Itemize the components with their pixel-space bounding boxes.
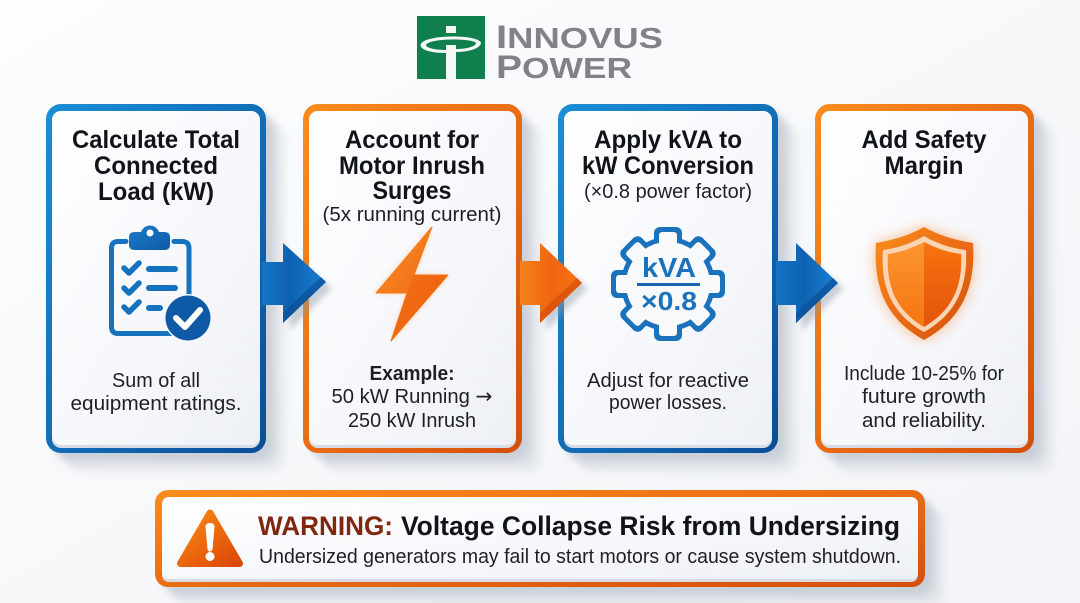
panel: add safety margin [815,104,1054,473]
panel: account for motor inrush surges [303,104,542,473]
heading: Surges [372,177,452,205]
icon: shield [876,227,973,340]
example text: 250 kW Inrush [348,409,476,432]
description [587,369,749,414]
heading: (5x running current) [322,203,502,226]
example text: 50 kW Running → [332,384,492,408]
icon: warning triangle [180,513,240,564]
heading: (×0.8 power factor) [584,180,752,203]
heading: Account for [345,126,479,154]
warning heading: Voltage Collapse Risk from Undersizing [401,511,900,541]
logo wordmark: POWER [496,49,632,85]
description [844,362,1004,432]
arrow: step 1 to 2 [262,243,332,330]
heading: Apply kVA to [594,126,742,154]
example text: Example: [370,362,454,385]
description: power losses. [609,391,727,414]
heading: Calculate Total [72,126,240,154]
description: equipment ratings. [70,392,242,415]
icon: lightning bolt [376,227,448,341]
heading: Margin [884,152,964,180]
description: future growth [862,385,986,408]
heading [322,126,502,226]
logo mark [417,16,485,79]
logo: Innovus Power [417,16,663,85]
panel: calculate total connected load [46,104,286,473]
description: Adjust for reactive [587,369,749,392]
icon: gear with kVA x0.8: ×0.8 [641,286,697,316]
arrow: step 2 to 3 [520,243,588,330]
arrow: step 3 to 4 [776,243,844,330]
icon: clipboard checklist [112,226,212,342]
heading: Add Safety [862,126,987,154]
description: Include 10-25% for [844,362,1004,385]
heading: Connected [94,152,218,180]
logo wordmark [496,19,663,85]
warning heading: WARNING: [258,511,393,541]
heading: Load (kW) [98,178,214,206]
description [70,369,242,415]
heading [582,126,754,203]
panel: apply kVA to kW conversion [558,104,798,473]
example text [332,362,492,432]
heading [862,126,987,180]
heading: Motor Inrush [339,152,485,180]
heading: kW Conversion [582,152,754,180]
logo wordmark: INNOVUS [496,19,663,55]
icon: gear with kVA x0.8: kVA [642,252,696,283]
callout: warning banner [155,490,945,603]
description: and reliability. [862,409,986,432]
icon: gear with kVA x0.8 [611,227,725,341]
warning description: Undersized generators may fail to start motors or cause system shutdown. [259,545,901,568]
heading [72,126,240,206]
description: Sum of all [112,369,200,392]
